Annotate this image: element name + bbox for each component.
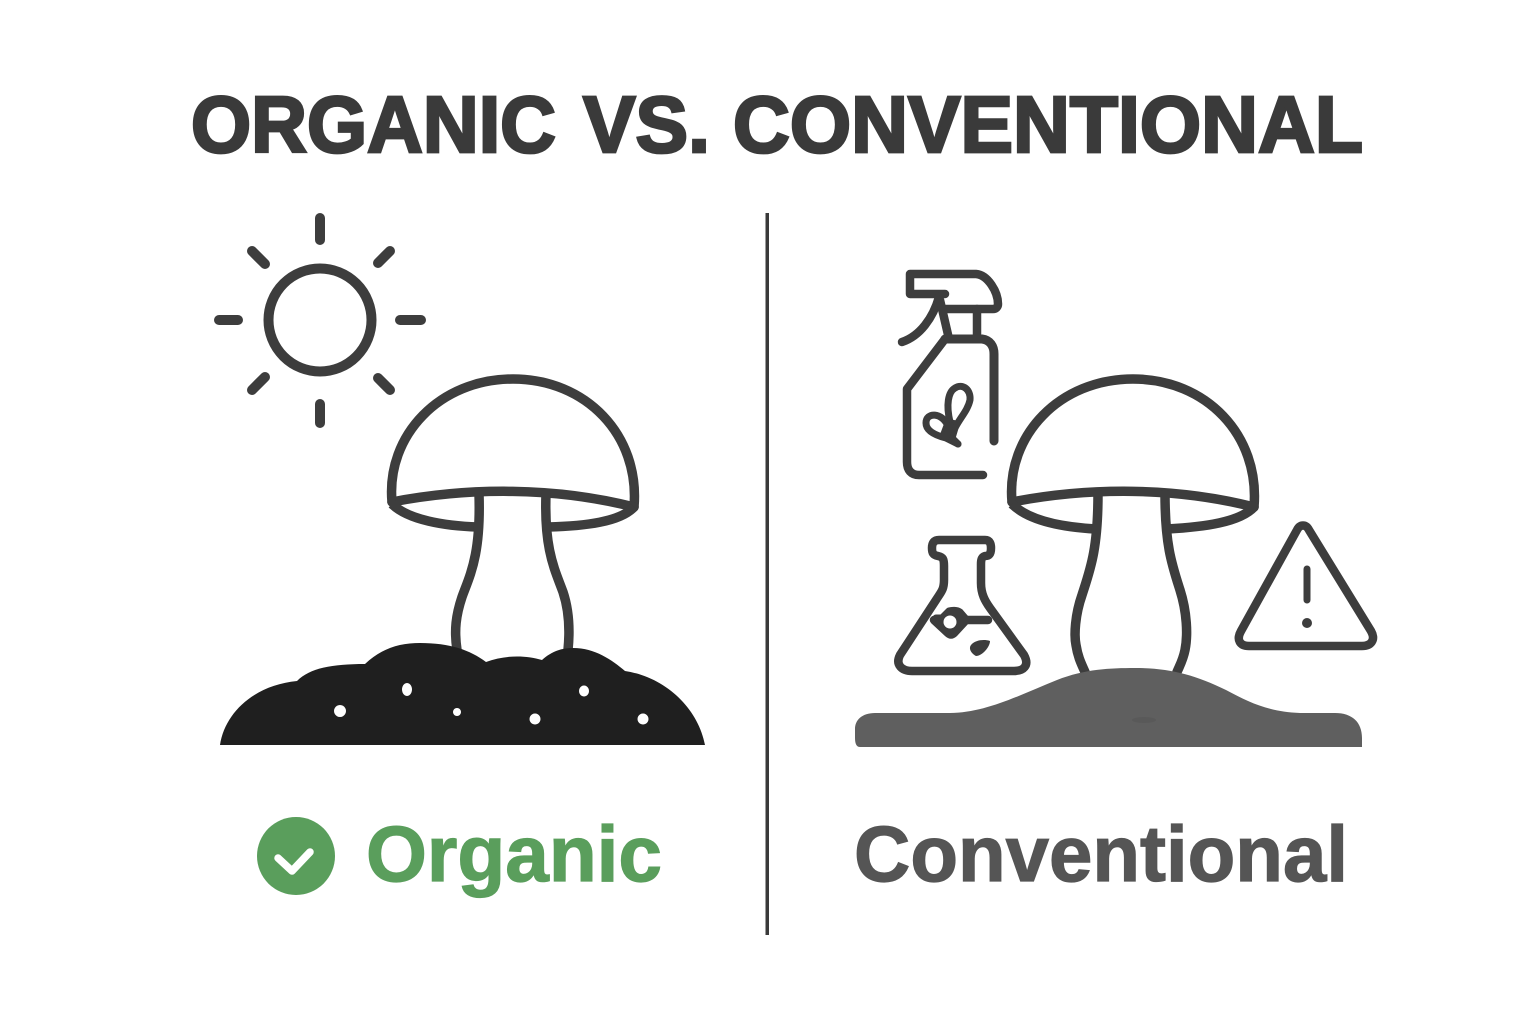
title: ORGANIC: [191, 80, 556, 169]
label: organic: [257, 809, 662, 898]
icon: chemical flask: [898, 540, 1026, 671]
center divider: [766, 213, 769, 935]
conventional heading: Conventional: [854, 809, 1348, 898]
panel: conventional: [854, 274, 1373, 898]
icon: conventional mushroom: [1012, 379, 1254, 672]
icon: spray bottle: [902, 274, 998, 475]
title: [191, 80, 1363, 169]
icon: depleted soil: [855, 668, 1362, 747]
title: VS.: [583, 80, 710, 169]
icon: sun: [219, 218, 421, 423]
title: CONVENTIONAL: [733, 80, 1363, 169]
organic heading: Organic: [366, 809, 662, 898]
panel: organic: [219, 218, 705, 898]
bottle contents: insect splat: [926, 386, 970, 444]
icon: warning triangle: [1239, 526, 1373, 646]
icon: rich soil: [220, 643, 705, 745]
icon: organic mushroom: [392, 379, 634, 650]
icon: green check badge: [257, 817, 335, 895]
flask contents: [938, 611, 990, 656]
